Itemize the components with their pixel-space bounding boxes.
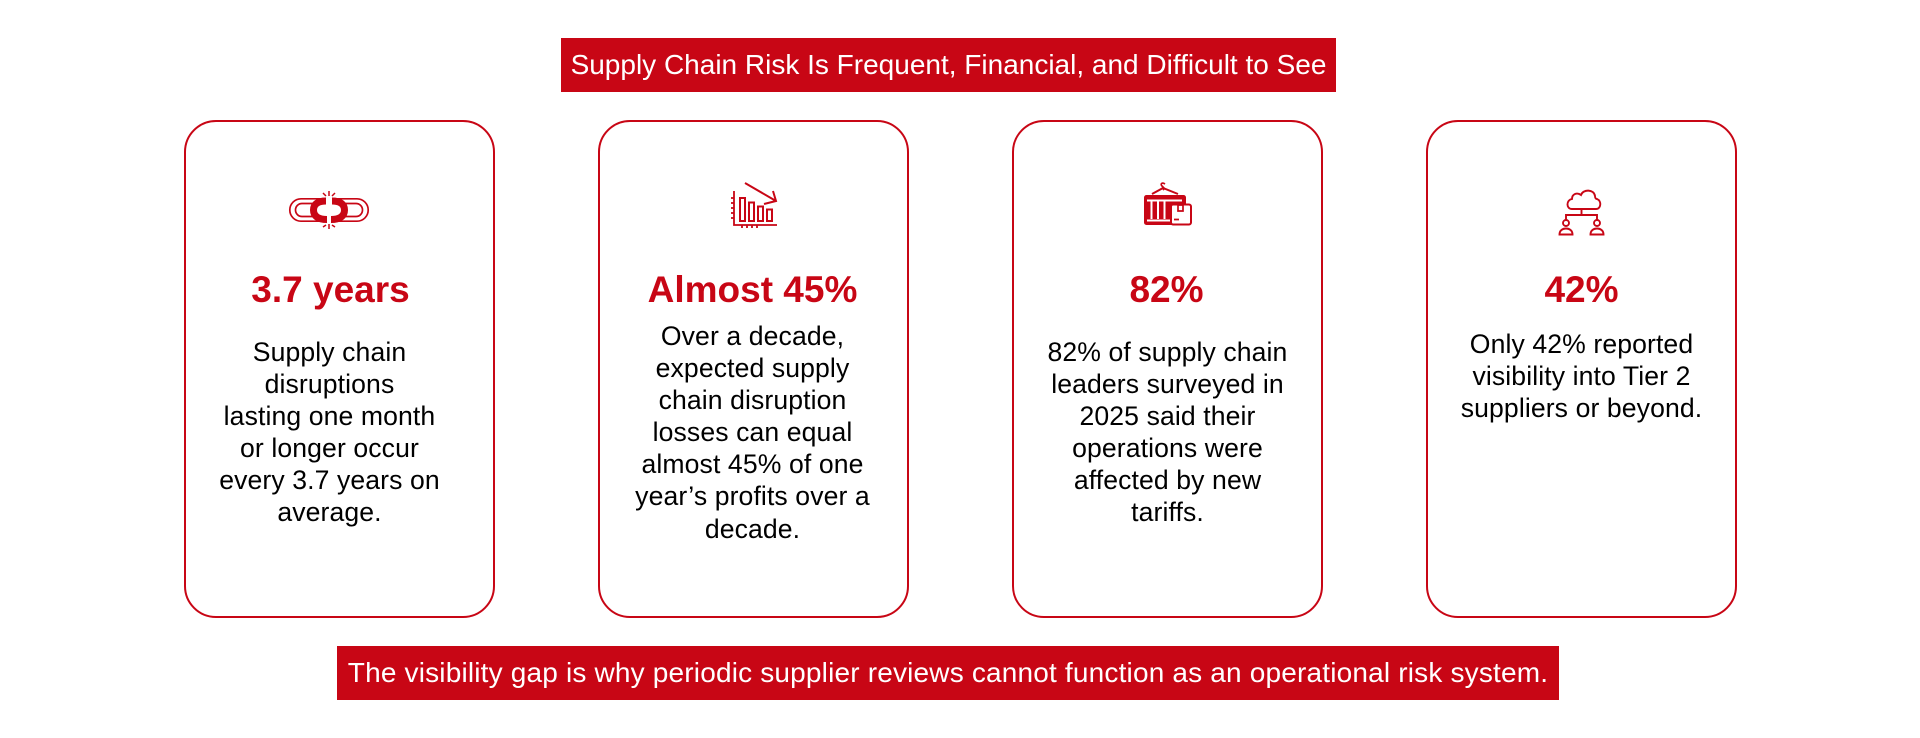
description: tier 2 visibility: suppliers or beyond. <box>1461 393 1702 423</box>
title banner: Supply Chain Risk Is Frequent, Financial, and Difficult to See <box>571 49 1326 80</box>
stat heading: almost 45%: Almost 45% <box>648 269 857 310</box>
description: disruption frequency: Supply chain <box>253 337 406 367</box>
description: disruption losses <box>635 321 870 544</box>
description: disruption losses: chain disruption <box>659 385 846 415</box>
title banner <box>561 38 1336 92</box>
description: tier 2 visibility: visibility into Tier 2 <box>1472 361 1690 391</box>
icon: shipping container and box <box>1144 183 1191 225</box>
description: tier 2 visibility: Only 42% reported <box>1470 329 1693 359</box>
description: tariffs: 82% of supply chain <box>1048 337 1287 367</box>
description: disruption frequency: every 3.7 years on <box>219 465 440 495</box>
stat heading: 42%: 42% <box>1544 269 1619 310</box>
description: tariffs: tariffs. <box>1131 497 1204 527</box>
panel: 42% <box>1426 120 1737 618</box>
description: disruption losses: year’s profits over a <box>635 481 870 511</box>
description: tariffs <box>1048 337 1287 527</box>
description: disruption frequency: average. <box>277 497 382 527</box>
description: tariffs: leaders surveyed in <box>1051 369 1284 399</box>
bottom banner <box>337 646 1559 700</box>
description: disruption frequency: disruptions <box>265 369 394 399</box>
description: tariffs: 2025 said their <box>1080 401 1255 431</box>
stat heading: 82%: 82% <box>1129 269 1204 310</box>
stat heading: 3.7 years: 3.7 years <box>251 269 410 310</box>
panel: almost 45% <box>598 120 909 618</box>
description: disruption losses: losses can equal <box>653 417 852 447</box>
panel: 82% <box>1012 120 1323 618</box>
description: disruption losses: Over a decade, <box>661 321 844 351</box>
description: disruption losses: expected supply <box>656 353 849 383</box>
description: tariffs: affected by new <box>1074 465 1261 495</box>
bottom banner: The visibility gap is why periodic supplier reviews cannot function as an operational risk system. <box>348 657 1548 688</box>
description: disruption frequency <box>219 337 440 527</box>
description: disruption frequency: lasting one month <box>224 401 435 431</box>
description: disruption losses: almost 45% of one <box>642 449 863 479</box>
description: tier 2 visibility <box>1461 329 1702 423</box>
icon: broken chain <box>290 191 368 229</box>
icon: declining bar chart <box>731 183 777 228</box>
panel: 3.7 years <box>184 120 495 618</box>
description: disruption frequency: or longer occur <box>240 433 419 463</box>
description: disruption losses: decade. <box>705 514 800 544</box>
description: tariffs: operations were <box>1072 433 1263 463</box>
icon: cloud network with users <box>1560 191 1604 234</box>
